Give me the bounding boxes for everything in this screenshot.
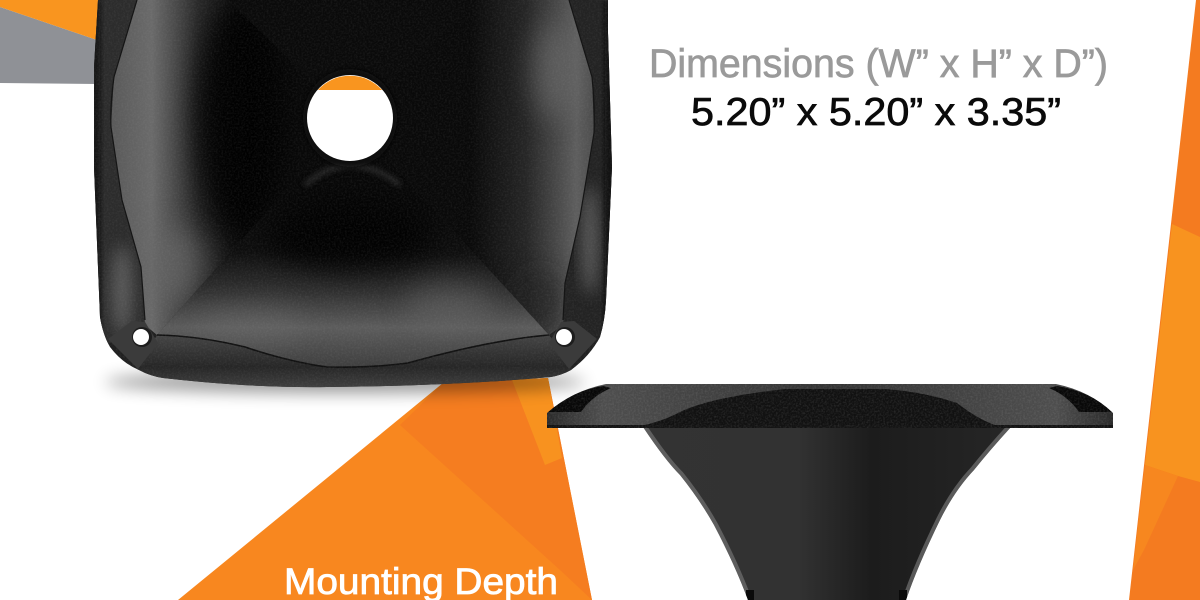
bottom panel [158, 153, 548, 366]
shape: top-left grey band [0, 7, 97, 84]
right rim [596, 34, 612, 342]
horn throat [303, 69, 397, 167]
seams [111, 0, 145, 320]
bottom lip [135, 335, 575, 390]
text: dimensions value: 5.20” x 5.20” x 3.35” [691, 91, 1061, 134]
shape: central orange triangle [178, 378, 592, 600]
arc below throat [305, 165, 400, 185]
left panel [112, 0, 318, 335]
left rim [92, 0, 145, 345]
shape: top-left orange wedge [0, 0, 98, 40]
heading: dimensions label: Dimensions (W” x H” x D”) [649, 42, 1108, 86]
right panel [382, 0, 594, 335]
shadow: under front horn [105, 371, 585, 393]
right mounting boss [549, 321, 597, 369]
shape: right orange band [1129, 0, 1200, 600]
icon: front view of horn [92, 0, 614, 392]
top panel [228, 0, 476, 86]
horn flange [545, 382, 1115, 430]
horn neck [640, 426, 1015, 600]
icon: side view of horn [545, 382, 1115, 600]
left mounting boss [108, 321, 158, 369]
texture [92, 0, 614, 392]
